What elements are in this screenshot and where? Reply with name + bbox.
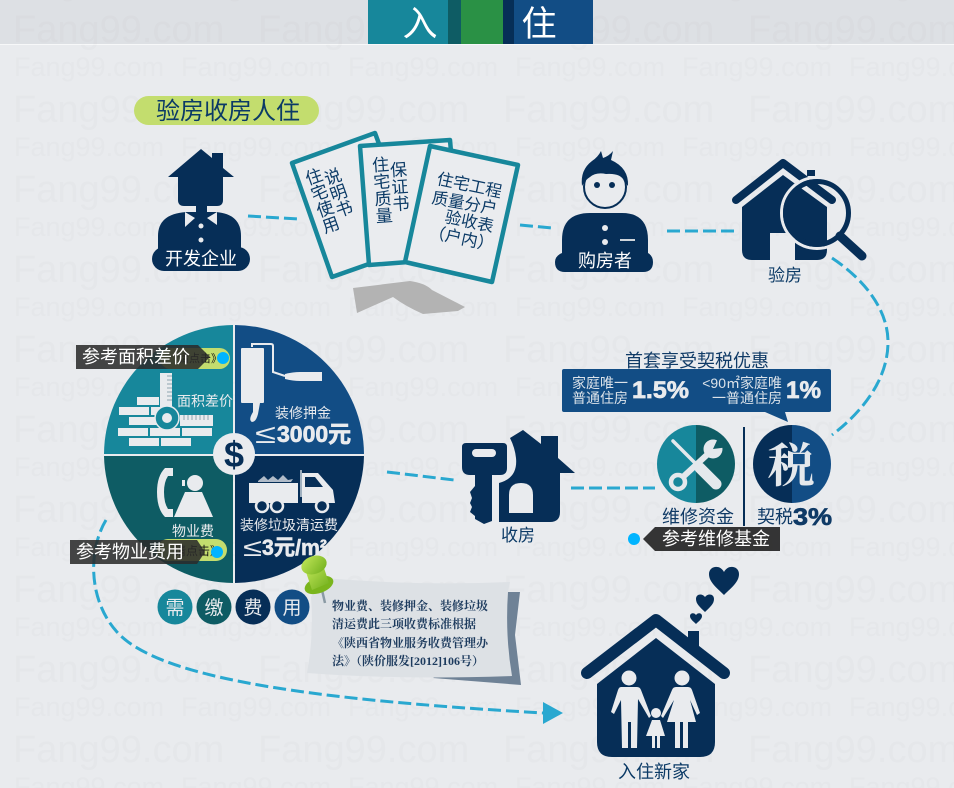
quadrant: area difference: 面积差价	[177, 393, 233, 409]
icon: house inspection: 验房	[768, 266, 802, 285]
document: user manual: 住宅使用	[300, 166, 341, 237]
icon: buyer	[555, 151, 653, 272]
rate 1.5%: 普通住房	[572, 390, 628, 406]
fees required badges: 缴	[204, 597, 224, 619]
icon: tax: 税	[768, 441, 814, 493]
icon: family in new home	[587, 620, 724, 757]
quadrant: property fee	[104, 456, 233, 583]
divider between fund and tax	[743, 427, 745, 526]
rate 1%: 1%	[786, 377, 821, 404]
quadrant: decoration deposit	[235, 325, 364, 454]
father	[611, 670, 651, 748]
connector: buyer to inspection	[667, 230, 735, 232]
document: acceptance form: 质量分户	[430, 188, 499, 218]
connector: tools to key house	[571, 486, 655, 490]
label: maintenance fund: 维修资金	[662, 507, 734, 527]
mother	[661, 670, 700, 748]
quadrant: debris removal fee: ≤	[243, 534, 262, 562]
document: quality guarantee: 保证书	[387, 160, 410, 213]
document: acceptance form: 验收表	[443, 207, 496, 236]
quadrant: debris removal fee: 装修垃圾清运费	[240, 517, 338, 533]
quadrant: decoration deposit: 3000元	[277, 421, 351, 447]
hotspot: property fee reference: 请点击》	[174, 544, 222, 558]
fees required badges	[158, 590, 310, 624]
icon: maintenance tools	[657, 425, 735, 503]
callout heading: 首套享受契税优惠	[625, 351, 769, 371]
label: deed tax 3%: 契税	[757, 507, 793, 527]
icon: house inspection	[736, 163, 862, 285]
icon: green push pin	[299, 552, 336, 603]
rate 1.5%: 家庭唯一	[572, 375, 628, 391]
rate 1.5%: 1.5%	[632, 377, 689, 404]
quadrant: debris removal fee: 3元/m²	[262, 535, 327, 560]
icon: developer	[152, 149, 250, 271]
note paper: 清运费此三项收费标准根据	[332, 616, 476, 631]
fees required badges: 用	[282, 598, 302, 619]
document: acceptance form: 住宅工程	[435, 169, 504, 202]
hotspot: area difference reference: 请点击》	[178, 352, 222, 365]
rate 1%: <90㎡家庭唯	[702, 375, 782, 391]
label: move into new home: 入住新家	[618, 762, 690, 782]
document: user manual: 说明书	[319, 166, 354, 220]
connector: documents to buyer	[520, 225, 552, 228]
rate 1.5%	[572, 375, 689, 406]
rate 1%	[702, 375, 821, 406]
note paper: 《陕西省物业服务收费管理办	[332, 635, 489, 650]
hotspot: area difference reference	[76, 345, 230, 369]
icon: developer: 开发企业	[165, 249, 237, 269]
note paper: 法》（陕价服发[2012]106号）	[332, 653, 484, 668]
icon: key and house: 收房	[501, 526, 535, 545]
center dollar badge	[213, 433, 255, 475]
icon: hearts	[690, 567, 739, 624]
label: deed tax 3%	[757, 504, 832, 531]
fees required badges: 费	[243, 597, 263, 619]
quadrant: decoration deposit: ≤	[255, 419, 276, 449]
document: quality guarantee: 住宅质量	[369, 155, 393, 224]
connector: developer to documents	[248, 216, 298, 219]
connector: inspection to tax	[832, 258, 888, 435]
child	[646, 708, 665, 748]
icon: hand shadow	[353, 281, 465, 314]
connector: fee wheel to key house	[387, 472, 454, 480]
document: acceptance form: （户内）	[427, 222, 496, 255]
documents	[292, 133, 518, 282]
icon: buyer: 购房者	[578, 251, 632, 271]
hotspot: maintenance fund reference: 参考维修基金	[662, 529, 770, 549]
note paper	[307, 578, 521, 685]
header title band	[368, 0, 593, 44]
header title band: 住	[521, 5, 557, 44]
note paper: 物业费、装修押金、装修垃圾	[332, 598, 488, 613]
fee wheel	[104, 325, 364, 583]
hotspot: maintenance fund reference	[628, 527, 780, 551]
quadrant: area difference	[104, 325, 233, 454]
icon: key and house	[462, 430, 575, 545]
quadrant: decoration deposit: 装修押金	[275, 405, 331, 421]
document: quality guarantee	[360, 140, 460, 265]
quadrant: property fee: 物业费	[172, 523, 214, 539]
section heading pill: 验房收房人住	[156, 98, 300, 125]
long curved arrow to new home	[94, 520, 563, 724]
callout box	[562, 369, 831, 422]
document: user manual	[292, 133, 417, 277]
quadrant: debris removal fee	[235, 456, 364, 583]
label: deed tax 3%: 3%	[793, 504, 832, 531]
hotspot: property fee reference	[70, 539, 227, 564]
rate 1%: 一普通住房	[712, 390, 782, 406]
header title band: 入	[402, 5, 438, 44]
document: acceptance form	[405, 146, 518, 282]
icon: tax	[753, 425, 831, 503]
center dollar badge: $	[224, 434, 244, 475]
fees required badges: 需	[165, 598, 185, 619]
tax benefit callout	[562, 351, 831, 422]
hotspot: area difference reference: 参考面积差价	[82, 347, 190, 367]
hotspot: property fee reference: 参考物业费用	[76, 542, 184, 562]
